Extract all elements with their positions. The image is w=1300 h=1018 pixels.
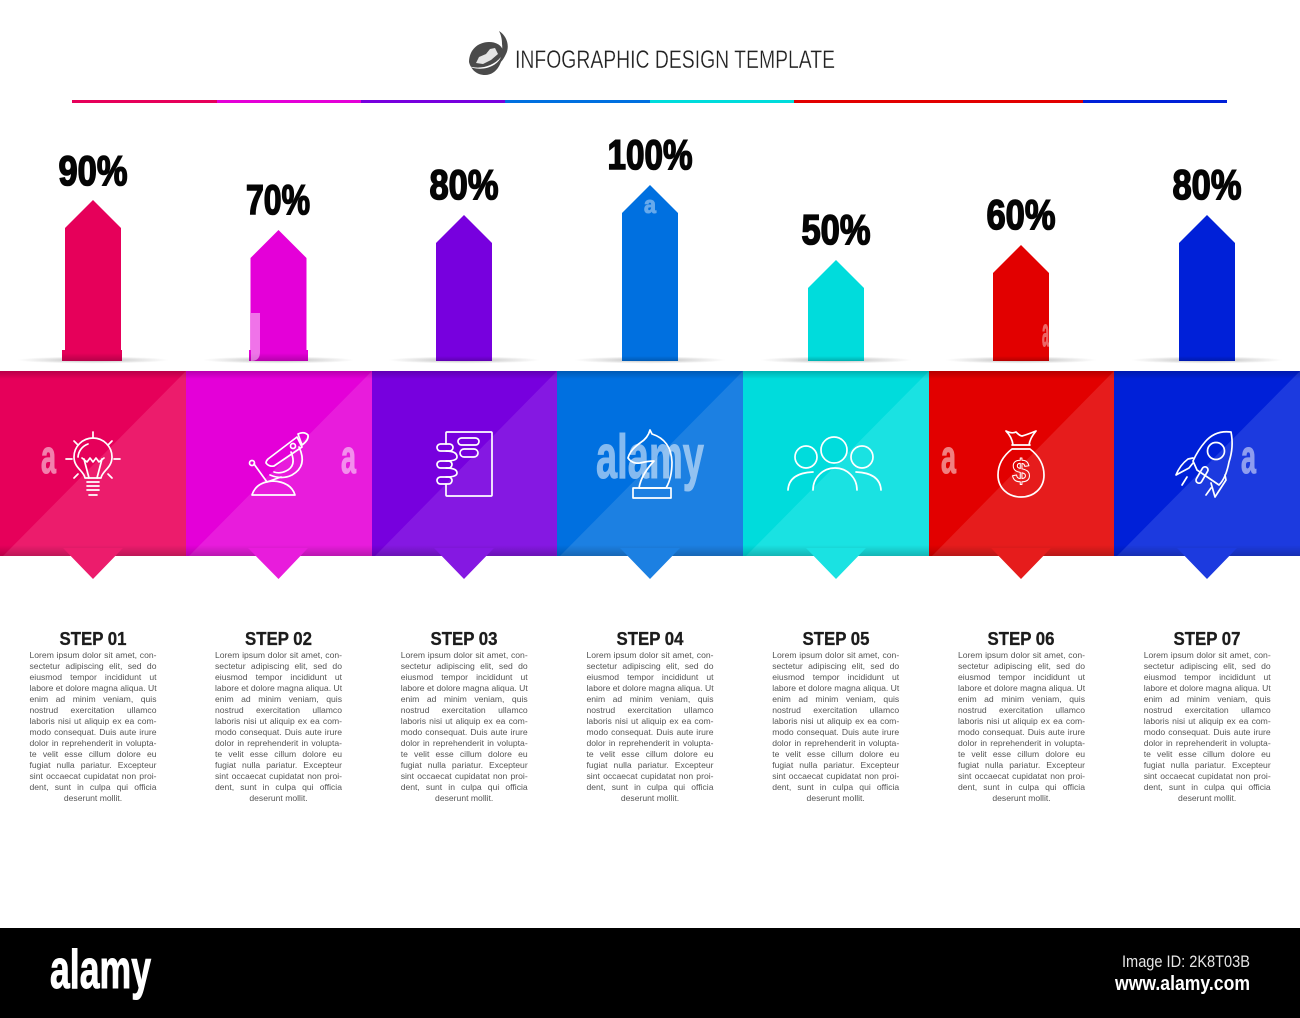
text block: step 05: Lorem ipsum dolor sit amet, con-	[772, 650, 899, 660]
text block: step 04: sectetur adipiscing elit, sed do	[586, 661, 714, 671]
bar: 90%: 90%	[58, 147, 128, 194]
bar: 60%: 60%	[986, 191, 1056, 238]
text block: step 04: laboris nisi ut aliquip ex ea com-	[586, 716, 714, 726]
text block: step 06: fugiat nulla pariatur. Excepteur	[958, 760, 1085, 770]
step headings	[60, 629, 1240, 649]
text block: step 06: sectetur adipiscing elit, sed do	[958, 661, 1085, 671]
icon: logo	[466, 31, 508, 75]
text block: step 01: dent, sunt in culpa qui officia	[30, 782, 156, 792]
footer logo: alamy	[50, 938, 151, 1000]
bar: 90%	[17, 147, 169, 364]
heading: step 05: STEP 05	[802, 629, 870, 649]
text block: step 03: sint occaecat cupidatat non proi-	[401, 771, 528, 781]
text block: step 07: fugiat nulla pariatur. Excepteur	[1144, 760, 1271, 770]
bar: 50%: 50%	[802, 206, 870, 253]
text block: step 02: enim ad minim veniam, quis	[215, 694, 342, 704]
text block: step 01: labore et dolore magna aliqua. Ut	[30, 683, 157, 693]
text block: step 05: dolor in reprehenderit in volupta-	[772, 738, 899, 748]
text block: step 06: Lorem ipsum dolor sit amet, con-	[958, 650, 1085, 660]
text block: step 04: fugiat nulla pariatur. Excepteur	[586, 760, 714, 770]
bar: 70%: 70%	[246, 176, 310, 223]
text block: step 04	[586, 650, 714, 803]
text block: step 07: Lorem ipsum dolor sit amet, con-	[1144, 650, 1271, 660]
text block: step 03: enim ad minim veniam, quis	[401, 694, 528, 704]
text block: step 02: sint occaecat cupidatat non proi-	[215, 771, 342, 781]
text block: step 05: eiusmod tempor incididunt ut	[772, 672, 899, 682]
text block: step 01: nostrud exercitation ullamco	[30, 705, 156, 715]
text block: step 06: enim ad minim veniam, quis	[958, 694, 1085, 704]
text block: step 06: dent, sunt in culpa qui officia	[958, 782, 1085, 792]
text block: step 02: te velit esse cillum dolore eu	[215, 749, 342, 759]
text block: step 01: te velit esse cillum dolore eu	[30, 749, 156, 759]
text block: step 03: sectetur adipiscing elit, sed do	[401, 661, 528, 671]
panel: step 05	[743, 371, 929, 579]
text block: step 02: sectetur adipiscing elit, sed do	[215, 661, 342, 671]
text block: step 01: fugiat nulla pariatur. Excepteur	[30, 760, 156, 770]
step text columns	[30, 650, 1271, 803]
text block: step 05: enim ad minim veniam, quis	[772, 694, 899, 704]
panel: step 02	[186, 371, 372, 579]
text block: step 04: modo consequat. Duis aute irure	[586, 727, 714, 737]
bar: 80%: 80%	[430, 161, 498, 208]
text block: step 03: deserunt mollit.	[435, 793, 493, 803]
icon: microscope	[250, 433, 308, 495]
text block: step 07: sint occaecat cupidatat non proi-	[1144, 771, 1271, 781]
text block: step 02: labore et dolore magna aliqua. Ut	[215, 683, 342, 693]
text block: step 06: laboris nisi ut aliquip ex ea com-	[958, 716, 1085, 726]
text block: step 06: te velit esse cillum dolore eu	[958, 749, 1085, 759]
text block: step 02: deserunt mollit.	[249, 793, 308, 803]
text block: step 02: modo consequat. Duis aute irure	[215, 727, 342, 737]
text block: step 05: fugiat nulla pariatur. Excepteur	[772, 760, 899, 770]
text block: step 03: eiusmod tempor incididunt ut	[401, 672, 528, 682]
text block: step 04: enim ad minim veniam, quis	[586, 694, 714, 704]
text block: step 01: eiusmod tempor incididunt ut	[30, 672, 156, 682]
text block: step 01: dolor in reprehenderit in volupta-	[30, 738, 156, 748]
icon: money bag: $	[1012, 453, 1030, 489]
text block: step 03: te velit esse cillum dolore eu	[401, 749, 528, 759]
panel: step 06	[929, 371, 1114, 579]
icon: rocket	[1176, 432, 1232, 497]
text block: step 01: sint occaecat cupidatat non proi-	[30, 771, 156, 781]
text block: step 04: dent, sunt in culpa qui officia	[586, 782, 714, 792]
bar: 100%: 100%	[608, 131, 692, 178]
bar: 50%	[760, 206, 912, 364]
text block: step 02: eiusmod tempor incididunt ut	[215, 672, 342, 682]
text block: step 06: labore et dolore magna aliqua. Ut	[958, 683, 1085, 693]
bar: 60%	[945, 191, 1097, 364]
panel: step 02: a	[341, 430, 356, 483]
text block: step 05: deserunt mollit.	[807, 793, 865, 803]
text block: step 07: labore et dolore magna aliqua. Ut	[1144, 683, 1271, 693]
text block: step 07: deserunt mollit.	[1178, 793, 1236, 803]
text block: step 02	[215, 650, 342, 803]
text block: step 07: laboris nisi ut aliquip ex ea com-	[1144, 716, 1271, 726]
text block: step 02: laboris nisi ut aliquip ex ea com-	[215, 716, 342, 726]
icon: light bulb	[66, 432, 120, 495]
text block: step 03: Lorem ipsum dolor sit amet, con-	[401, 650, 528, 660]
text block: step 02: dent, sunt in culpa qui officia	[215, 782, 342, 792]
text block: step 01	[30, 650, 157, 803]
text block: step 06	[958, 650, 1086, 803]
bar: 70%	[202, 176, 354, 364]
text block: step 06: nostrud exercitation ullamco	[958, 705, 1085, 715]
text block: step 06: eiusmod tempor incididunt ut	[958, 672, 1085, 682]
icon: notebook	[437, 432, 492, 496]
title: INFOGRAPHIC DESIGN TEMPLATE	[515, 46, 835, 74]
text block: step 02: dolor in reprehenderit in volupta-	[215, 738, 342, 748]
icon: team of people	[788, 437, 881, 490]
text block: step 04: labore et dolore magna aliqua. Ut	[586, 683, 714, 693]
panel: step 04: alamy	[596, 423, 704, 492]
text block: step 04: te velit esse cillum dolore eu	[586, 749, 714, 759]
panel: step 01: a	[41, 430, 56, 483]
text block: step 06: modo consequat. Duis aute irure	[958, 727, 1085, 737]
text block: step 03: fugiat nulla pariatur. Excepteur	[401, 760, 528, 770]
icon: chess knight	[628, 430, 672, 498]
text block: step 01: sectetur adipiscing elit, sed do	[30, 661, 156, 671]
text block: step 05: dent, sunt in culpa qui officia	[772, 782, 899, 792]
text block: step 01: modo consequat. Duis aute irure	[30, 727, 156, 737]
coloured header rule	[72, 100, 1227, 103]
text block: step 07: te velit esse cillum dolore eu	[1144, 749, 1271, 759]
text block: step 03: dolor in reprehenderit in volupta-	[401, 738, 528, 748]
text block: step 05: sint occaecat cupidatat non proi-	[772, 771, 899, 781]
text block: step 03: laboris nisi ut aliquip ex ea com-	[401, 716, 528, 726]
text block: step 01: laboris nisi ut aliquip ex ea com-	[30, 716, 156, 726]
text block: step 04: Lorem ipsum dolor sit amet, con-	[586, 650, 714, 660]
text block: step 03	[400, 650, 528, 803]
bar: 100%	[574, 131, 726, 364]
text block: step 07: eiusmod tempor incididunt ut	[1144, 672, 1271, 682]
text block: step 05: nostrud exercitation ullamco	[772, 705, 899, 715]
panel: step 07: a	[1241, 430, 1256, 483]
text block: step 03: modo consequat. Duis aute irure	[401, 727, 528, 737]
text block: step 02: nostrud exercitation ullamco	[215, 705, 342, 715]
text block: step 04: sint occaecat cupidatat non proi-	[586, 771, 714, 781]
text block: step 07: dolor in reprehenderit in volupta-	[1144, 738, 1271, 748]
website: www.alamy.com	[1114, 973, 1250, 995]
text block: step 04: eiusmod tempor incididunt ut	[586, 672, 714, 682]
text block: step 01: Lorem ipsum dolor sit amet, con-	[30, 650, 156, 660]
text block: step 06: sint occaecat cupidatat non proi-	[958, 771, 1085, 781]
text block: step 05: laboris nisi ut aliquip ex ea com-	[772, 716, 899, 726]
text block: step 01: enim ad minim veniam, quis	[30, 694, 156, 704]
bar: 80%	[388, 161, 540, 364]
bar: 100%: a	[644, 192, 657, 219]
panel: step 06: a	[941, 430, 956, 483]
text block: step 04: dolor in reprehenderit in volupta-	[586, 738, 714, 748]
text block: step 03: dent, sunt in culpa qui officia	[401, 782, 528, 792]
text block: step 06: deserunt mollit.	[992, 793, 1051, 803]
text block: step 05	[772, 650, 900, 803]
text block: step 01: deserunt mollit.	[64, 793, 122, 803]
text block: step 07	[1144, 650, 1271, 803]
text block: step 04: nostrud exercitation ullamco	[586, 705, 714, 715]
text block: step 05: te velit esse cillum dolore eu	[772, 749, 899, 759]
text block: step 03: labore et dolore magna aliqua. Ut	[401, 683, 528, 693]
text block: step 07: enim ad minim veniam, quis	[1144, 694, 1271, 704]
panel: step 01	[0, 371, 186, 579]
bar: 60%: a	[1042, 311, 1049, 355]
text block: step 06: dolor in reprehenderit in volupta-	[958, 738, 1085, 748]
text block: step 07: sectetur adipiscing elit, sed do	[1144, 661, 1271, 671]
panel: step 03	[372, 371, 557, 579]
text block: step 02: fugiat nulla pariatur. Excepteur	[215, 760, 342, 770]
icon: money bag	[998, 431, 1044, 497]
image id: Image ID: 2K8T03B	[1122, 952, 1250, 971]
text block: step 07: dent, sunt in culpa qui officia	[1144, 782, 1271, 792]
heading: step 07: STEP 07	[1174, 629, 1240, 649]
text block: step 07: modo consequat. Duis aute irure	[1144, 727, 1271, 737]
colour band panels	[0, 371, 1300, 579]
header: logo and title	[466, 31, 835, 75]
heading: step 02: STEP 02	[245, 629, 312, 649]
bar: 80%	[1131, 161, 1283, 364]
bar chart: percentage arrows	[17, 131, 1283, 364]
panel: step 07	[1114, 371, 1300, 579]
heading: step 03: STEP 03	[430, 629, 498, 649]
text block: step 07: nostrud exercitation ullamco	[1144, 705, 1271, 715]
text block: step 05: sectetur adipiscing elit, sed do	[772, 661, 899, 671]
text block: step 02: Lorem ipsum dolor sit amet, con-	[215, 650, 342, 660]
text block: step 04: deserunt mollit.	[621, 793, 679, 803]
text block: step 05: labore et dolore magna aliqua. Ut	[772, 683, 899, 693]
text block: step 03: nostrud exercitation ullamco	[401, 705, 528, 715]
bar: 80%: 80%	[1172, 161, 1242, 208]
text block: step 05: modo consequat. Duis aute irure	[772, 727, 899, 737]
heading: step 04: STEP 04	[616, 629, 684, 649]
panel: step 04	[557, 371, 743, 579]
heading: step 01: STEP 01	[60, 629, 126, 649]
footer bar	[0, 928, 1300, 1018]
heading: step 06: STEP 06	[988, 629, 1054, 649]
